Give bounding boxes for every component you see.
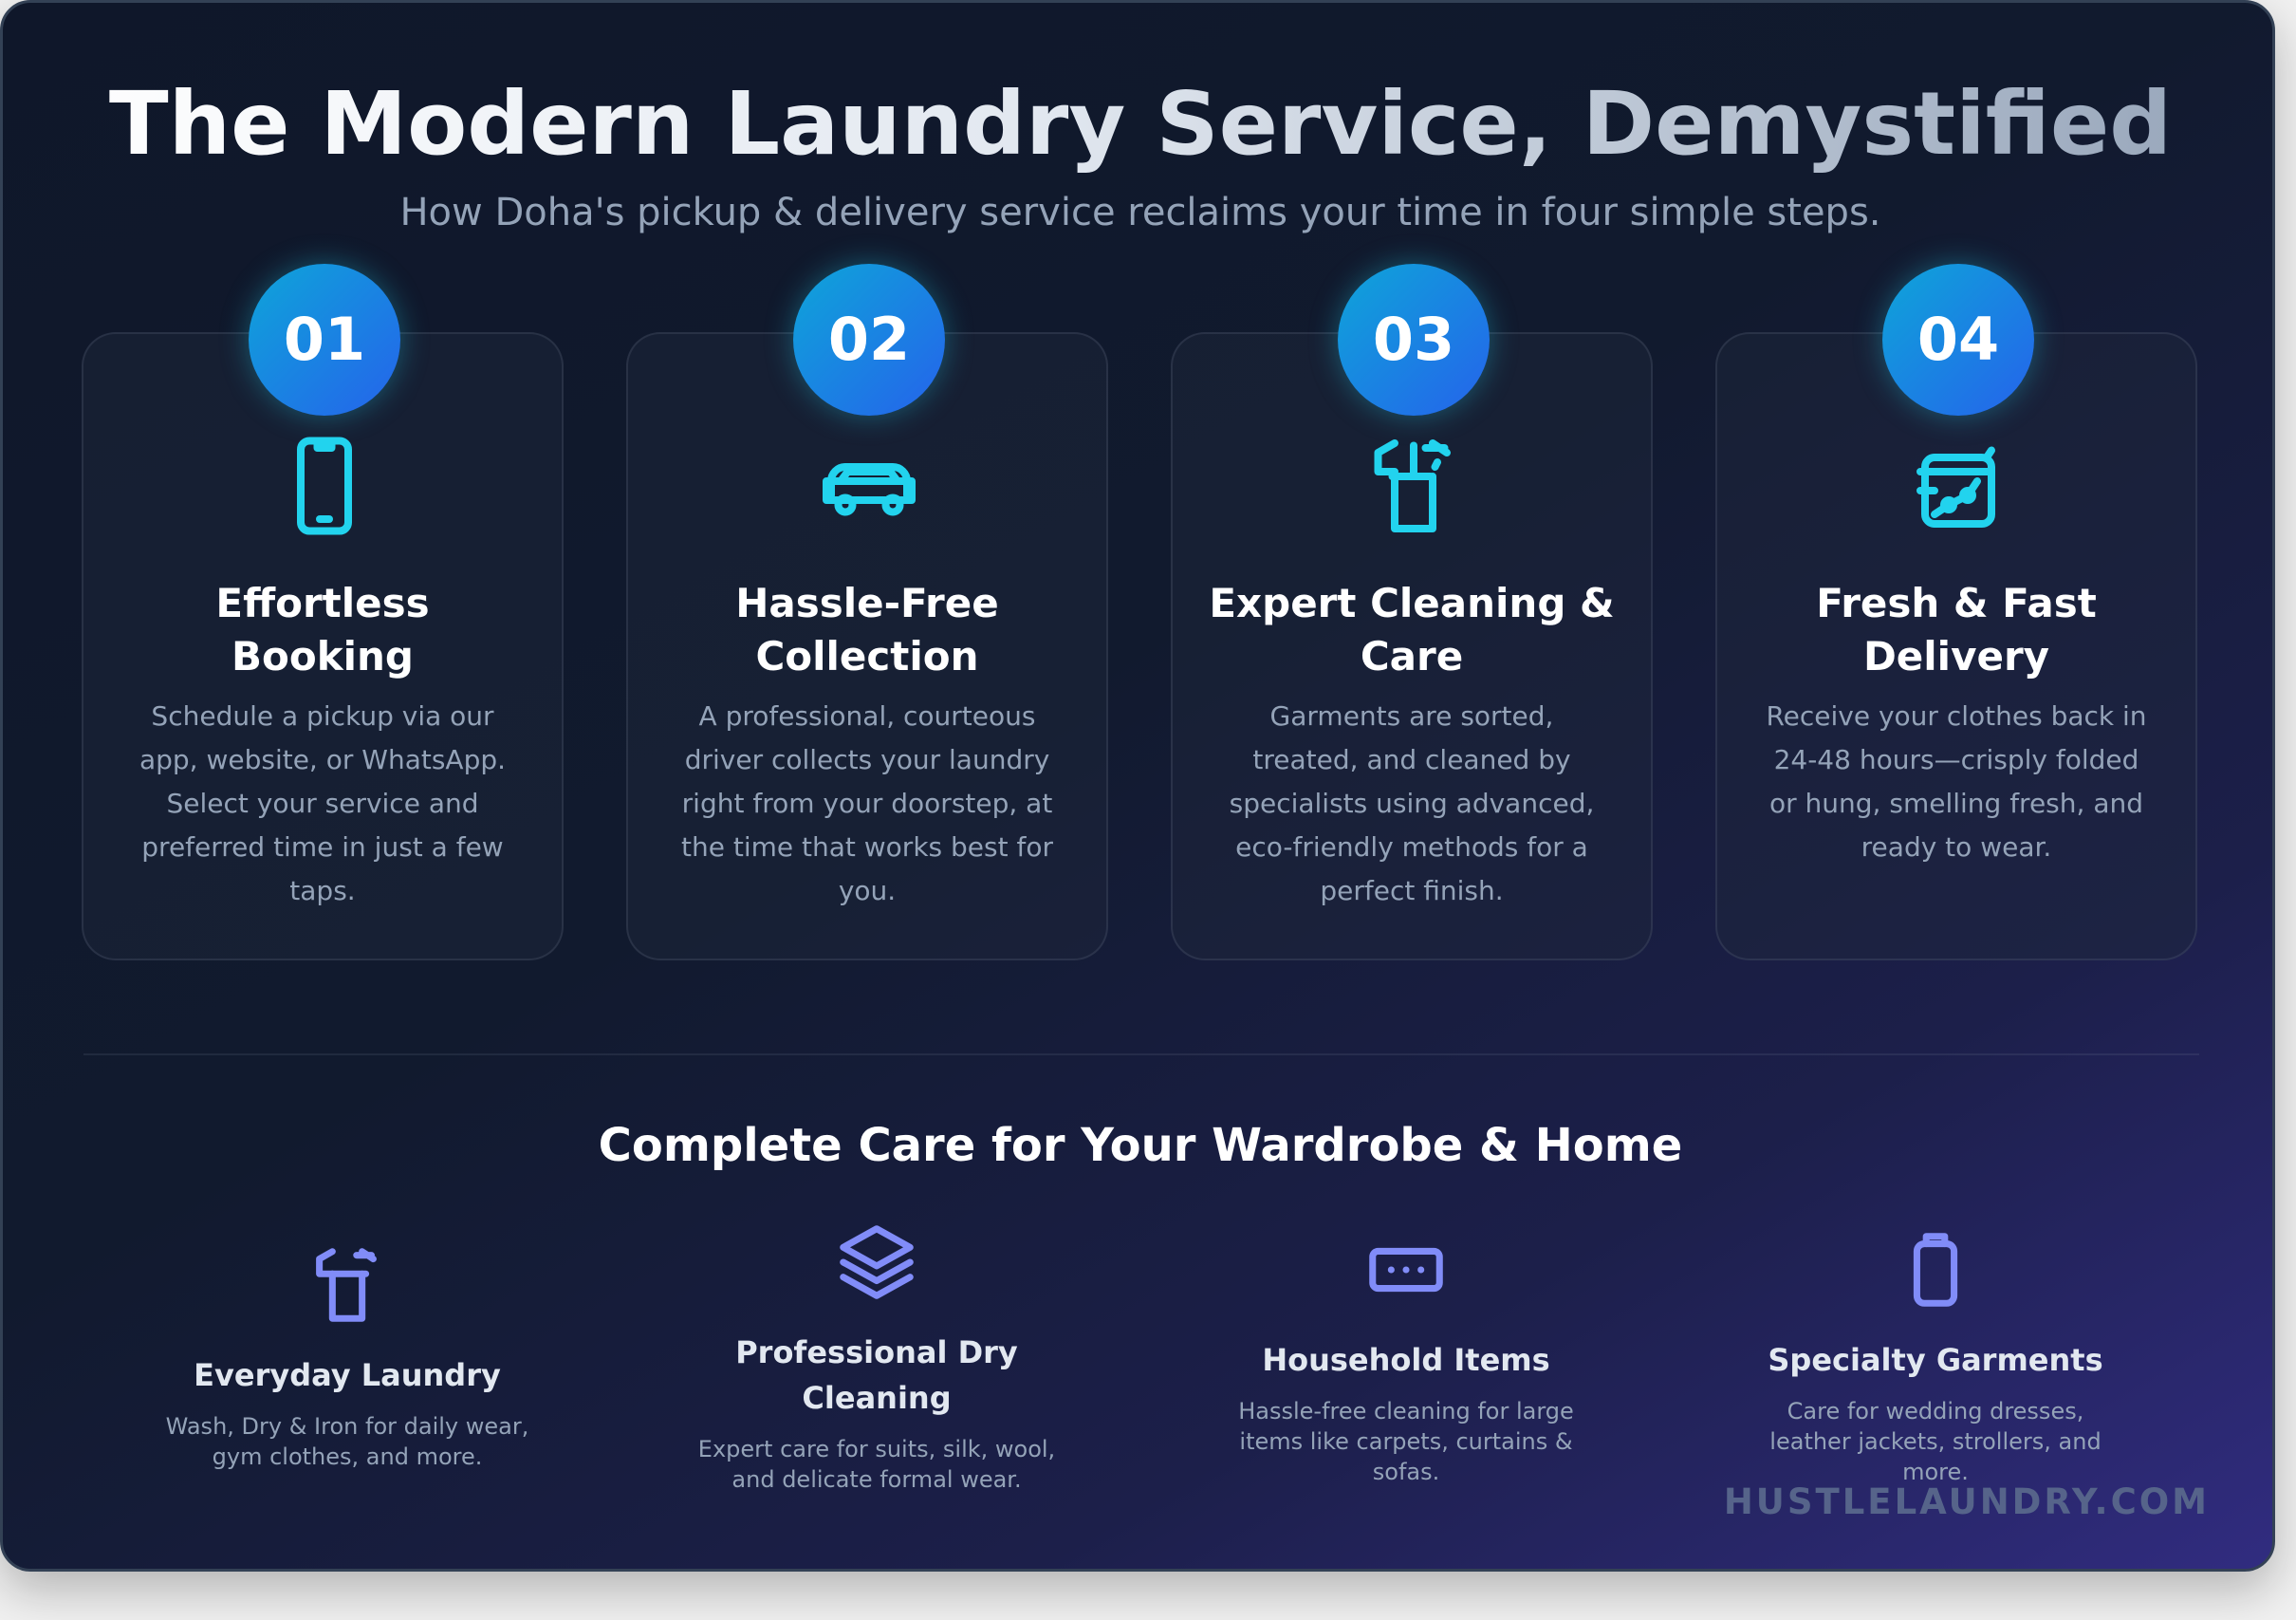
heading (1816, 580, 2097, 680)
badge 02: 02 (828, 305, 910, 374)
card: step 4 (1715, 332, 2197, 960)
icon: garment bag (1913, 1233, 1958, 1307)
heading (215, 580, 430, 680)
title: Everyday Laundry (194, 1357, 501, 1393)
title: Specialty Garments (1768, 1342, 2103, 1378)
icon: delivery package (1916, 446, 1995, 528)
card: step 3 (1171, 332, 1653, 960)
service: specialty (1768, 1233, 2103, 1485)
text: Garments are sorted, treated, and cleaned by specialists using advanced, eco-friendly methods for a perfect finish. (1230, 700, 1594, 906)
badge 03: 03 (1373, 305, 1454, 374)
icon: phone (297, 437, 352, 535)
title (735, 1334, 1018, 1416)
service: household (1238, 1247, 1574, 1485)
service: dry cleaning (698, 1225, 1055, 1493)
badge 02 (793, 264, 945, 416)
heading: Effortless (215, 580, 430, 626)
heading (735, 580, 999, 680)
heading: Hassle-Free (735, 580, 999, 626)
icon: van (823, 463, 916, 516)
subtitle: How Doha's pickup & delivery service reclaims your time in four simple steps. (399, 191, 1881, 234)
title: The Modern Laundry Service, Demystified (109, 73, 2172, 175)
text: Wash, Dry & Iron for daily wear, gym clothes, and more. (166, 1413, 528, 1470)
service: everyday laundry (166, 1248, 528, 1470)
badge 03 (1338, 264, 1490, 416)
title: Household Items (1262, 1342, 1550, 1378)
heading: Expert Cleaning & (1209, 580, 1615, 626)
text: Schedule a pickup via our app, website, or WhatsApp. Select your service and preferred time in just a few taps. (139, 700, 506, 906)
badge 04 (1882, 264, 2034, 416)
text: Hassle-free cleaning for large items like carpets, curtains & sofas. (1238, 1398, 1574, 1485)
heading: Booking (231, 633, 414, 680)
title: Professional Dry (735, 1334, 1018, 1370)
heading: Care (1361, 633, 1463, 680)
icon: shirt (316, 1248, 377, 1322)
text: Receive your clothes back in 24-48 hours—crisply folded or hung, smelling fresh, and ready to wear. (1766, 700, 2147, 863)
title: Cleaning (802, 1380, 952, 1416)
card: step 1 (82, 332, 564, 960)
icon: layers (840, 1225, 914, 1299)
heading: Fresh & Fast (1816, 580, 2097, 626)
heading: Delivery (1863, 633, 2049, 680)
section heading: Complete Care for Your Wardrobe & Home (599, 1119, 1682, 1172)
icon: shirt (1374, 439, 1451, 532)
text: Care for wedding dresses, leather jackets, strollers, and more. (1769, 1398, 2102, 1485)
icon: sofa/box (1369, 1247, 1443, 1293)
text: A professional, courteous driver collects your laundry right from your doorstep, at the time that works best for you. (681, 700, 1053, 906)
heading: Collection (755, 633, 979, 680)
watermark: HUSTLELAUNDRY.COM (1724, 1481, 2210, 1522)
badge 01: 01 (284, 305, 365, 374)
badge 04: 04 (1917, 305, 1999, 374)
card: step 2 (626, 332, 1108, 960)
text: Expert care for suits, silk, wool, and delicate formal wear. (698, 1436, 1055, 1493)
badge 01 (249, 264, 400, 416)
heading (1209, 580, 1615, 680)
